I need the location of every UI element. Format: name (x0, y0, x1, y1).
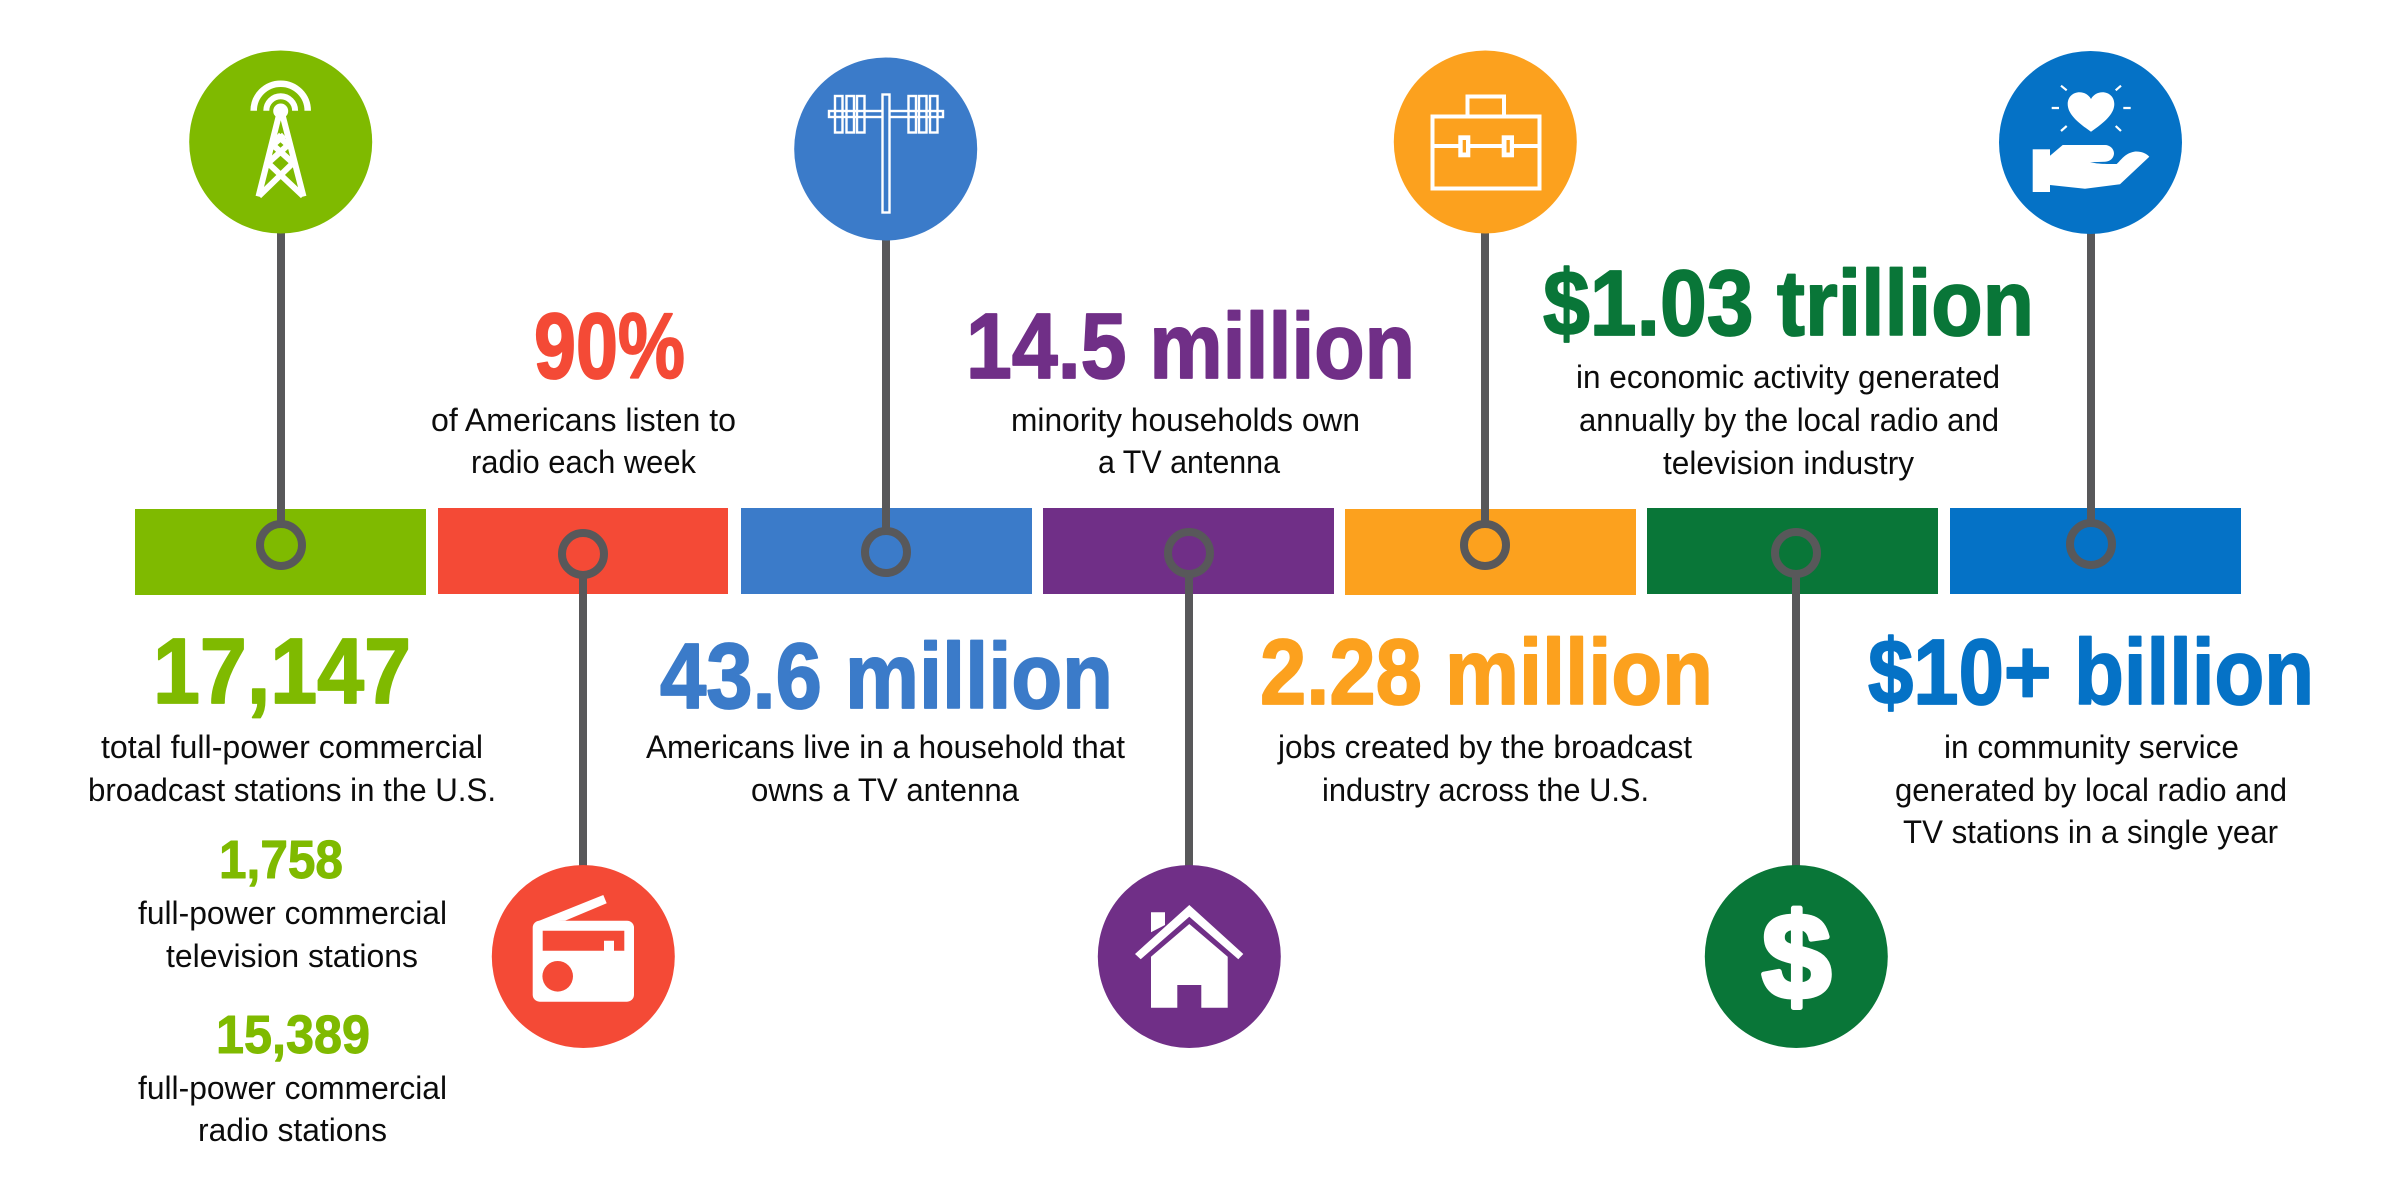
timeline bar segments (135, 508, 2241, 595)
stat: $10+ billion: TV stations in a single year (1903, 814, 2278, 850)
stat: $10+ billion: in community service (1944, 729, 2239, 765)
stat: 2.28 million (1260, 620, 1713, 808)
stat: 90%: 90% (534, 294, 685, 398)
icon: hand holding heart (1999, 51, 2182, 234)
stat: 43.6 million: 43.6 million (660, 624, 1113, 728)
stat: 43.6 million: Americans live in a household that (646, 729, 1125, 765)
connector: purple stem and ring (1168, 532, 1210, 868)
stat: 17,147 stations (88, 619, 496, 808)
stat: 90%: of Americans listen to (431, 402, 736, 438)
stat: $10+ billion: generated by local radio and (1895, 772, 2287, 808)
connector: blue stem and ring (865, 238, 907, 573)
stat: 1,758 television stations (138, 830, 447, 974)
stat: $1.03 trillion (1543, 251, 2034, 481)
stat: $1.03 trillion: $1.03 trillion (1543, 251, 2034, 355)
stat: 1,758 television stations: television stations (166, 938, 418, 974)
stat: 17,147 stations: total full-power commercial (101, 729, 483, 765)
connector: green stem and ring (260, 230, 302, 566)
stat: 2.28 million: industry across the U.S. (1322, 772, 1649, 808)
stat: $1.03 trillion: annually by the local radio and (1579, 402, 1999, 438)
connector: red stem and ring (562, 533, 604, 868)
connector: dark green stem and ring (1775, 532, 1817, 868)
connector: orange stem and ring (1464, 230, 1506, 566)
connector: blue stem and ring (2070, 230, 2112, 565)
stat: 15,389 radio stations: 15,389 (216, 1005, 370, 1065)
stat: 90%: radio each week (471, 444, 697, 480)
icon: dollar sign: $ (1762, 888, 1831, 1024)
icon: briefcase (1394, 50, 1577, 234)
stat: 14.5 million: minority households own (1011, 402, 1360, 438)
stat: 2.28 million: 2.28 million (1260, 620, 1713, 724)
stat: 43.6 million: owns a TV antenna (751, 772, 1019, 808)
stat: $10+ billion: $10+ billion (1868, 620, 2314, 724)
stat: 2.28 million: jobs created by the broadcast (1277, 729, 1692, 765)
stat: 15,389 radio stations: radio stations (198, 1112, 387, 1148)
stat: $1.03 trillion: in economic activity generated (1576, 359, 2000, 395)
stat: 1,758 television stations: 1,758 (219, 830, 343, 890)
icon: dollar sign (1705, 865, 1888, 1048)
stat: 14.5 million: 14.5 million (966, 294, 1415, 398)
icon: broadcast tower (189, 50, 372, 234)
stat: 17,147 stations: 17,147 (153, 619, 411, 723)
stat: $10+ billion (1868, 620, 2314, 850)
stat: 90% (431, 294, 736, 480)
icon: TV antenna (794, 58, 977, 240)
stat: $1.03 trillion: television industry (1663, 445, 1914, 481)
stat: 15,389 radio stations: full-power commercial (138, 1070, 447, 1106)
icon: radio (492, 865, 675, 1048)
stat: 14.5 million: a TV antenna (1098, 444, 1280, 480)
stat: 15,389 radio stations (138, 1005, 447, 1148)
stat: 43.6 million (646, 624, 1125, 808)
stat: 17,147 stations: broadcast stations in the U.S. (88, 772, 496, 808)
icon: house (1098, 865, 1281, 1048)
stat: 1,758 television stations: full-power commercial (138, 895, 447, 931)
stat: 14.5 million (966, 294, 1415, 480)
